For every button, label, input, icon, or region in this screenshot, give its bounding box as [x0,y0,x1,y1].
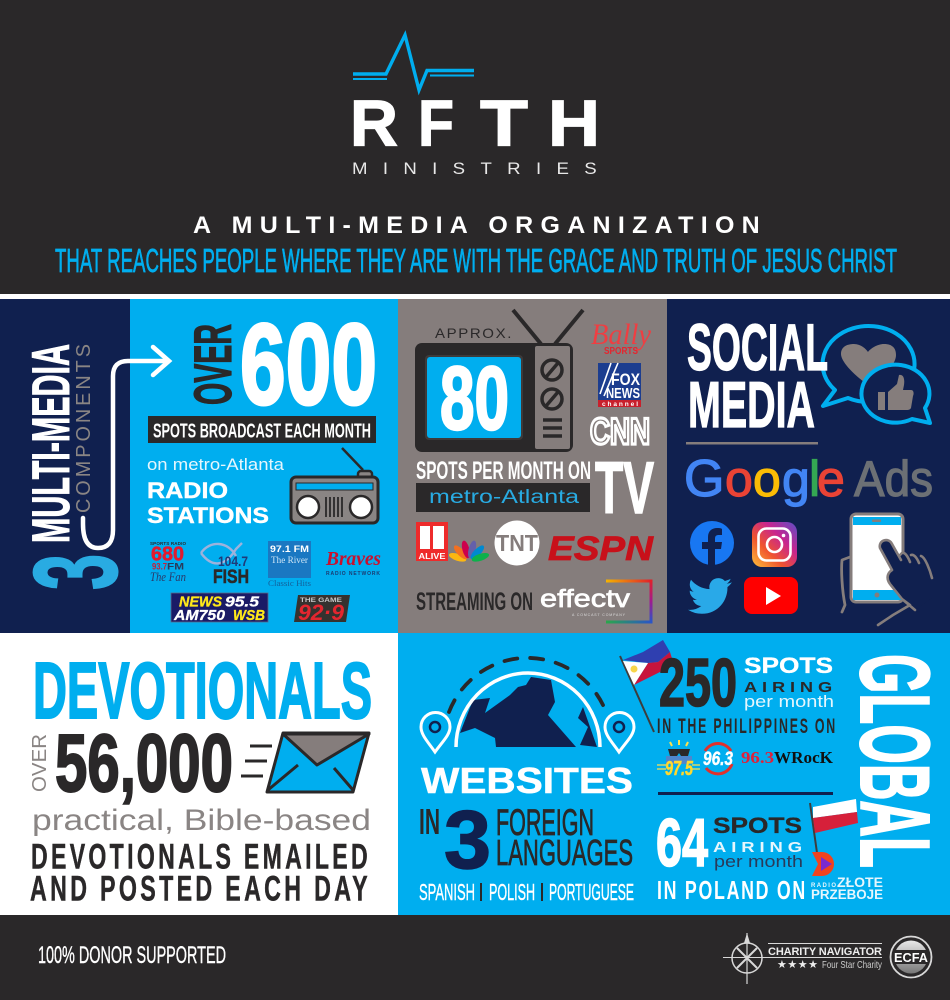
logo: news 95.5 wsb: NEWS [179,594,222,610]
text: approx: APPROX. [435,325,513,341]
badge: ecfa: ECFA [894,951,928,965]
banner: metro-atlanta: metro-Atlanta [429,487,580,508]
text: devotionals emailed and posted each day [30,838,371,908]
logo: braves radio network: Braves [325,548,381,570]
logo: news 95.5 wsb: 95.5 [225,594,260,610]
logo: 96.3 wrock: WRocK [774,748,834,767]
panel: tv [398,299,667,633]
wordmark: RFTH: T [480,86,528,160]
logo: news 95.5 wsb: AM750 [173,607,226,624]
text: in 3 foreign languages: 3 [444,793,491,886]
wordmark: RFTH: H [548,86,600,160]
icon: hand on phone [842,514,932,625]
logo: cnn: CNN [590,411,650,452]
logo: 96.3 circle: 96.3 [703,749,733,770]
logo: google ads: g [782,451,810,507]
logo: 97.1 the river: The River [271,556,309,566]
wordmark: RFTH: R [350,86,398,160]
heading: devotionals: DEVOTIONALS [33,646,372,735]
white divider strip [0,294,950,299]
logo: RFTH Ministries [350,35,612,178]
logo: the game 92.9 [294,595,350,625]
logo: 680 the fan: The Fan [150,569,186,584]
text: in 3 foreign languages: LANGUAGES [496,832,633,873]
logo: 11 alive: ALIVE [418,551,446,561]
logo: bally sports: SPORTS [604,346,638,357]
icon: philippines flag [620,640,674,732]
icon: television [415,310,583,452]
text: in poland on: IN POLAND ON [657,875,807,905]
text: streaming on: STREAMING ON [416,588,533,616]
number: 64: 64 [656,805,708,881]
logo: radio zlote przeboje [811,852,883,902]
logo: tnt [494,520,540,566]
text: spots airing per month poland [713,813,807,871]
logo: google ads: e [817,451,845,507]
text: over: OVER [29,734,51,792]
heading: social media [687,310,828,441]
number: 3: 3 [10,554,142,590]
icon: youtube [744,577,798,614]
logo: bally sports: Bally [591,318,652,351]
logo: google ads [684,450,933,508]
logo: 97.1 the river [268,541,311,588]
text: spots airing per month poland: SPOTS [713,813,802,838]
panel: websites and global [398,633,950,915]
logo: the game 92.9: THE GAME [300,597,343,604]
logo: 680 the fan: 93.7 [152,562,167,572]
icon: envelope [241,733,369,792]
number: 250: 250 [659,645,737,721]
logo: 680 the fan: SPORTS RADIO [150,541,186,546]
panel: social media [667,299,950,633]
logo: espn: ESPN [548,530,655,568]
logo: tnt: TNT [496,530,538,556]
panel: footer [0,915,950,1000]
banner: spots broadcast: SPOTS BROADCAST EACH MONTH [153,420,371,442]
text: spots airing per month philippines: AIRING [744,679,837,696]
logo: 104.7 fish: FISH [213,567,249,588]
logo: 96.3 circle [703,743,733,774]
arrow: components to radio [83,347,169,548]
text: spots airing per month poland: per month [714,852,803,871]
logo: 97.1 the river: 97.1 FM [270,544,309,555]
text: in 3 foreign languages: FOREIGN [496,802,594,843]
logo: 97.5: 97.5 [665,758,694,780]
logo: 96.3 wrock: 96.3 [741,748,774,767]
logo: 97.1 the river: Classic Hits [268,578,311,588]
icon: instagram [752,522,797,567]
text: spots airing per month philippines: SPOTS [744,653,833,678]
logo: effectv: effectv [540,585,631,613]
text: practical bible-based: practical, Bible-based [32,804,371,837]
badge: charity navigator: Four Star Charity [822,959,883,971]
logo: effectv: A COMCAST COMPANY [572,613,626,617]
logo: 680 the fan: FM [167,562,184,572]
text: radio stations [147,478,269,528]
logo: 96.3 wrock [741,748,834,767]
logo: braves radio network: RADIO NETWORK [326,571,380,577]
text: radio stations: STATIONS [147,503,269,528]
logo: google ads: o [753,451,781,507]
logo: news 95.5 wsb [171,593,268,624]
logo: google ads: Ads [854,451,933,507]
logo: google ads: l [809,451,820,507]
logo: nbc peacock [448,540,490,563]
logo: radio zlote przeboje: ZŁOTE [837,875,883,890]
logo: 97.5 [657,740,700,780]
badge: charity navigator: CHARITY NAVIGATOR [768,946,882,958]
heading: social media: SOCIAL [687,310,828,384]
wordmark: ministries: MINISTRIES [352,159,612,178]
text: spots per month on: SPOTS PER MONTH ON [416,457,591,485]
badge: ecfa [890,936,932,978]
icon: twitter [688,578,732,614]
text: spanish polish portuguese: POLISH [489,879,535,905]
panel: radio [130,299,398,633]
banner: metro-atlanta [416,483,590,512]
number: 600: 600 [240,301,377,429]
text: spanish polish portuguese: SPANISH [419,879,475,905]
text: spots airing per month philippines: per month [744,692,834,711]
text: radio stations: RADIO [147,478,228,503]
wordmark: RFTH: F [418,86,454,160]
logo: fox news channel: FOX [611,371,640,389]
badge: charity navigator [723,933,883,984]
wordmark: RFTH [350,86,600,160]
text: in 3 foreign languages [419,793,633,886]
heading: social media: MEDIA [688,368,815,441]
logo: radio zlote przeboje: PRZEBOJE [811,887,883,902]
icon: facebook [690,521,734,565]
text: spots airing per month poland: AIRING [713,839,807,856]
text: spanish polish portuguese: PORTUGUESE [549,879,634,905]
logo: 680 the fan: 680 [151,544,184,566]
number: 80: 80 [440,349,509,449]
logo: 104.7 fish [201,543,249,588]
icon: globe with pins [421,658,634,752]
logo: 680 the fan [150,541,186,584]
text: devotionals emailed and posted each day: AND POSTED EACH DAY [30,870,371,908]
panel: devotionals [0,633,398,915]
text: devotionals emailed and posted each day: DEVOTIONALS EMAILED [31,838,371,876]
heading: organization: A MULTI-MEDIA ORGANIZATION [193,212,767,239]
text: spanish polish portuguese [419,879,634,905]
logo: google ads: G [684,450,724,508]
text: tv: TV [595,448,654,529]
heading: websites: WEBSITES [421,760,633,801]
text: on metro-atlanta: on metro-Atlanta [147,455,285,474]
logo: fox news channel [598,363,641,408]
text: in 3 foreign languages: IN [419,801,440,842]
panel: 3 multi-media components [0,299,142,633]
icon: heartbeat pulse [353,35,474,90]
logo: google ads: o [725,451,753,507]
logo: fox news channel: channel [602,401,638,408]
logo: the game 92.9: 92·9 [298,600,345,625]
logo: 11 alive [416,522,448,561]
number: 56,000: 56,000 [55,718,233,809]
icon: speech bubbles [823,326,930,423]
icon: poland flag [810,799,858,860]
logo: news 95.5 wsb: WSB [233,607,265,624]
heading: multi-media: MULTI-MEDIA [22,344,81,543]
icon: radio [291,448,378,523]
panel: header [0,0,950,294]
logo: effectv [540,580,652,622]
text: spots airing per month philippines [744,653,837,711]
number: over: OVER [184,324,243,405]
subheading: components: COMPONENTS [73,341,95,513]
logo: fox news channel: NEWS [606,385,640,402]
text: donor supported: 100% DONOR SUPPORTED [38,942,226,969]
badge: charity navigator: ★★★★ [777,959,818,971]
logo: radio zlote przeboje: RADIO [811,883,836,889]
logo: 104.7 fish: 104.7 [218,553,248,569]
banner: spots broadcast [148,416,376,443]
